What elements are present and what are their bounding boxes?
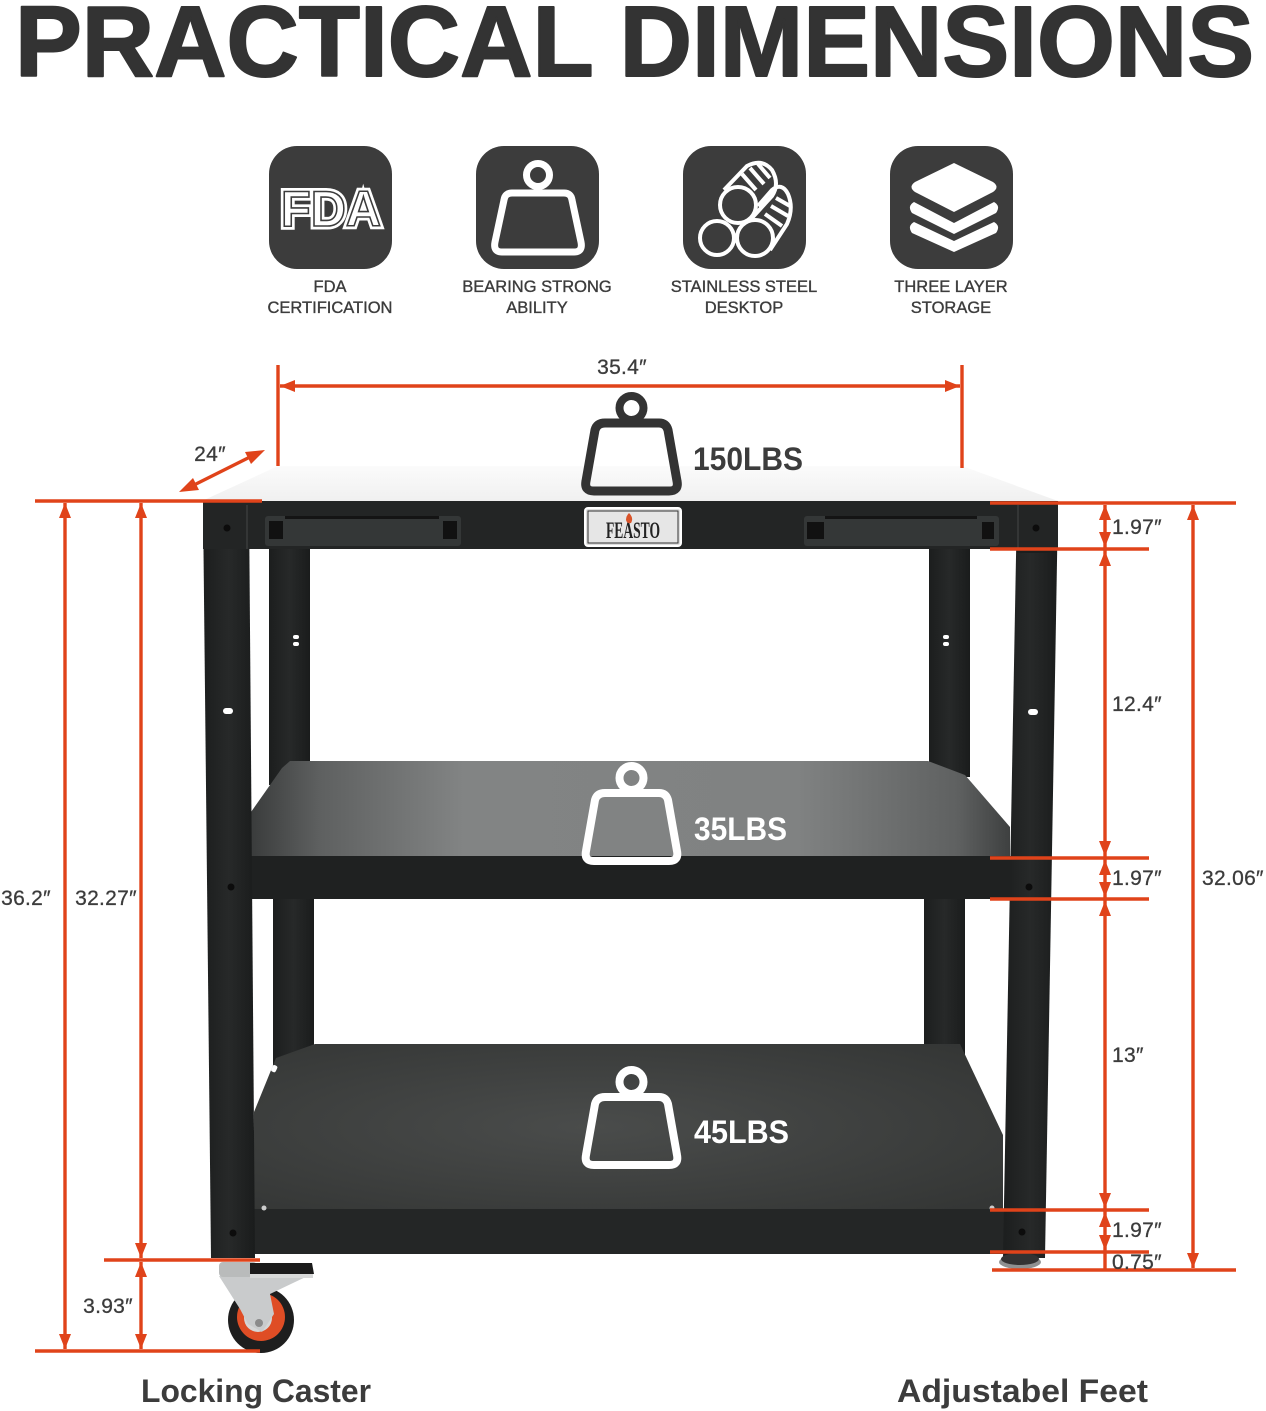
label: 150LBS: 150LBS: [693, 441, 803, 477]
icon: layers: [890, 146, 1013, 269]
dimension: width 35.4 inches: 35.4″: [597, 356, 647, 379]
label: 45LBS: 45LBS: [694, 1114, 789, 1150]
dimension: right side segments: [990, 503, 1236, 1274]
dimension: right side segments: 1.97″: [1112, 1219, 1162, 1242]
icon: FDA logo: [269, 146, 392, 269]
label: bearing strong ability: BEARING STRONG: [462, 278, 612, 296]
dimension: right side segments: 1.97″: [1112, 867, 1162, 890]
label: FDA certification: CERTIFICATION: [268, 299, 392, 317]
label: three layer storage: [894, 278, 1008, 317]
dimension: right side segments: 1.97″: [1112, 516, 1162, 539]
label: bearing strong ability: [462, 278, 612, 317]
left handle: [265, 516, 461, 546]
label: stainless steel desktop: [671, 278, 817, 317]
icon: weight: [586, 1070, 677, 1165]
icon: steel pipes: [683, 146, 806, 269]
dimension: height 32.06 inches: 32.06″: [1202, 867, 1264, 890]
feature: bearing strong ability: [462, 146, 612, 317]
feature: three layer storage: [890, 146, 1013, 317]
icon: weight: [476, 146, 599, 269]
caption: locking caster: Locking Caster: [141, 1373, 371, 1409]
icon: FDA logo: FDA: [281, 181, 381, 237]
dimension: overall height 36.2 inches: 36.2″: [1, 887, 51, 910]
caption: adjustable feet: Adjustabel Feet: [897, 1373, 1148, 1409]
dimension: right side segments: 13″: [1112, 1044, 1144, 1067]
label: stainless steel desktop: DESKTOP: [705, 299, 783, 317]
label: three layer storage: THREE LAYER: [894, 278, 1008, 296]
label: three layer storage: STORAGE: [911, 299, 991, 317]
dimension: caster 3.93 inches: 3.93″: [83, 1295, 133, 1318]
cart photo: [202, 466, 1058, 1353]
middle shelf: [251, 761, 1011, 899]
label: stainless steel desktop: STAINLESS STEEL: [671, 278, 817, 296]
dimension: frame height 32.27 inches: [75, 503, 260, 1260]
icon: weight: [586, 396, 677, 491]
icon: weight: [586, 766, 677, 861]
label: 35LBS: 35LBS: [694, 811, 787, 847]
dimension: frame height 32.27 inches: 32.27″: [75, 887, 137, 910]
adjustable foot: [999, 1253, 1041, 1269]
dimension: caster 3.93 inches: [83, 1262, 147, 1349]
feature: FDA certification: [268, 146, 392, 317]
label: bearing strong ability: ABILITY: [506, 299, 568, 317]
weight badge: 150LBS: [586, 396, 803, 491]
dimension: depth 24 inches: [179, 443, 265, 492]
dimension: right side segments: 12.4″: [1112, 693, 1162, 716]
rear legs: [269, 545, 970, 1065]
dimension: depth 24 inches: 24″: [194, 443, 226, 466]
label: FDA certification: FDA: [314, 278, 346, 296]
lower shelf: [254, 1044, 1004, 1254]
dimension: right side segments: 0.75″: [1112, 1251, 1162, 1274]
locking caster: [219, 1262, 314, 1353]
icon: FDA logo: FDA: [281, 181, 381, 237]
top rail: [203, 501, 1058, 553]
dimension: overall height 36.2 inches: [1, 501, 262, 1351]
label: FDA certification: [268, 278, 392, 317]
brand plate: FEASTO: [606, 518, 660, 543]
weight badge: 45LBS: [586, 1070, 789, 1165]
weight badge: 35LBS: [586, 766, 787, 861]
front legs: [203, 503, 1058, 1258]
feature: stainless steel desktop: [671, 146, 817, 317]
dimension: height 32.06 inches: [1187, 505, 1264, 1268]
right handle: [804, 516, 999, 546]
dimension: width 35.4 inches: [278, 356, 962, 468]
brand plate: [585, 508, 681, 546]
stainless steel top surface: [202, 466, 1058, 501]
